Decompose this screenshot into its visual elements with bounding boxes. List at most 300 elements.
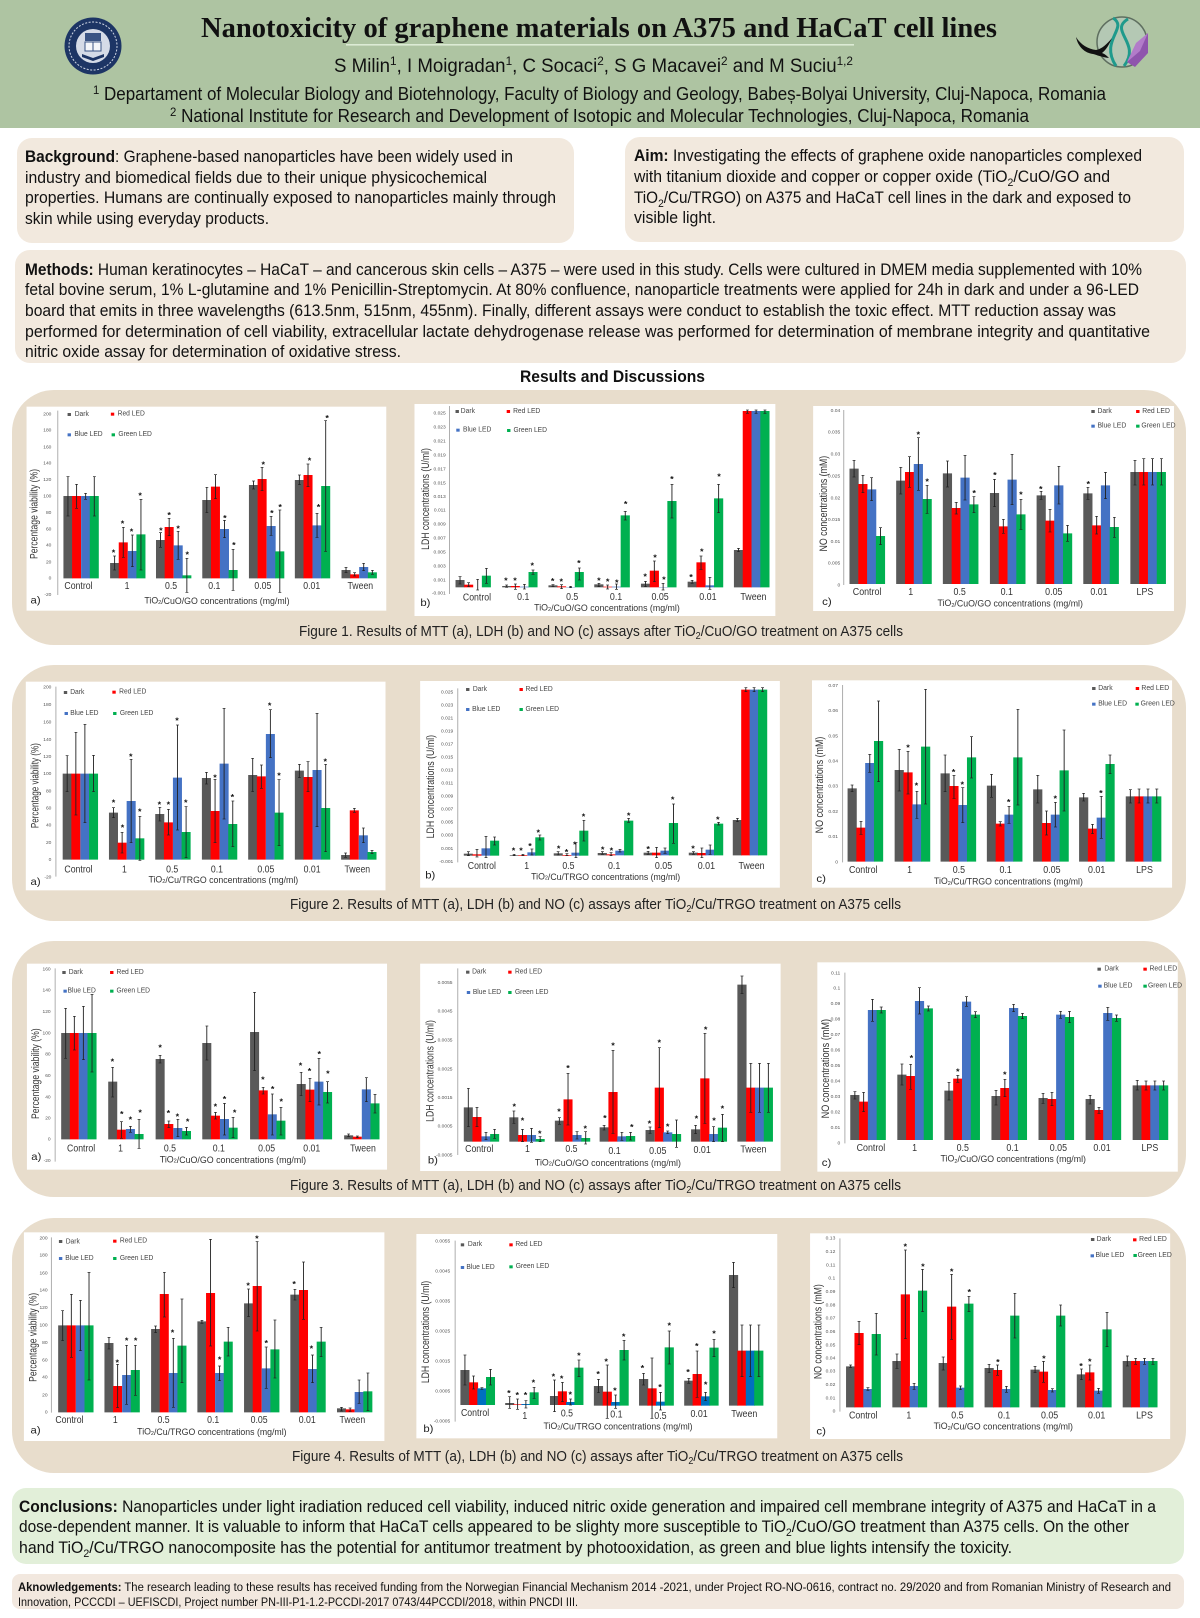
chart 1b: LDH release: 0.011	[434, 508, 446, 513]
chart 1c: NO concentration: 0.005	[828, 561, 841, 566]
chart 1b: LDH release: 0.1	[517, 591, 529, 602]
chart 1c: NO concentration: 0.035	[828, 430, 841, 435]
chart 2a: MTT viability: 60	[46, 806, 52, 811]
chart 2a: MTT viability: Percentage viability (%)	[29, 743, 42, 828]
chart 1b: LDH release: 0.013	[434, 494, 446, 499]
chart 2c: NO concentration: Blue LED	[1098, 700, 1127, 708]
chart 4a: MTT viability: 0.01	[299, 1415, 316, 1425]
panel: conclusions: hand TiO	[19, 1539, 86, 1557]
chart 2c: NO concentration	[812, 680, 1175, 888]
chart 3b: LDH release: 0.0015	[438, 1095, 453, 1100]
chart 1b: LDH release: -0.001	[432, 591, 446, 596]
chart 1a: MTT viability: 20	[46, 560, 52, 564]
chart 1a: MTT viability: 0.5	[165, 581, 177, 591]
chart 1c: NO concentration: Red LED	[1142, 408, 1170, 415]
chart 4b: LDH release: 0.01	[690, 1408, 708, 1419]
chart 3c: NO concentration: Blue LED	[1104, 982, 1132, 990]
chart 2b: LDH release: 1	[524, 860, 529, 871]
chart 3a: MTT viability: a)	[31, 1152, 41, 1163]
chart 2c: NO concentration: 1	[907, 864, 912, 875]
chart 4b: LDH release: Red LED	[515, 1241, 543, 1248]
chart 4c: NO concentration: LPS	[1136, 1410, 1153, 1421]
chart 2b: LDH release: 0.05	[655, 860, 672, 871]
authors: , I Moigradan	[397, 56, 506, 77]
affiliation 1: 1	[93, 83, 100, 97]
chart 3c: NO concentration: 0.01	[1093, 1142, 1111, 1153]
chart 3c: NO concentration: 0.06	[831, 1048, 841, 1053]
chart 3a: MTT viability: Control	[67, 1143, 95, 1154]
chart 3a: MTT viability: 80	[45, 1052, 51, 1057]
chart 3a: MTT viability: Red LED	[116, 969, 144, 976]
chart 1a: MTT viability: Control	[64, 581, 93, 591]
chart 1b: LDH release: Blue LED	[463, 426, 491, 434]
panel: conclusions: /CuO/GO treatment than A375 cells. On the other	[792, 1518, 1129, 1536]
chart 2a: MTT viability: 100	[43, 771, 52, 776]
panel: aim	[625, 137, 1184, 242]
chart 1a: MTT viability: 160	[43, 445, 52, 449]
chart 2b: LDH release: TiO	[531, 872, 547, 882]
chart 4a: MTT viability: 0.1	[207, 1415, 219, 1425]
panel: figure 1	[12, 390, 1186, 645]
caption: figure 2: 2	[686, 904, 692, 915]
chart 1b: LDH release: Dark	[461, 408, 475, 415]
chart 2c: NO concentration: 0.05	[1043, 864, 1061, 875]
chart 4c: NO concentration: 0.12	[826, 1249, 836, 1254]
chart 2a: MTT viability: /Cu/TRGO concentrations (mg/ml)	[165, 875, 298, 885]
chart 4c: NO concentration: c)	[816, 1426, 826, 1437]
chart 2c: NO concentration: TiO	[934, 877, 950, 887]
chart 4a: MTT viability: 1	[113, 1415, 118, 1425]
chart 4b: LDH release: 0.0015	[435, 1359, 451, 1364]
chart 1a: MTT viability: a)	[31, 595, 41, 606]
chart 2a: MTT viability: Control	[64, 864, 93, 875]
caption: figure 2: /Cu/TRGO treatment on A375 cells	[691, 896, 901, 913]
chart 3b: LDH release: -0.0005	[436, 1153, 453, 1157]
caption: figure 1: 2	[696, 631, 701, 642]
chart 3a: MTT viability: 0.5	[164, 1143, 176, 1154]
chart 3b: LDH release: 2	[549, 1162, 552, 1167]
chart 1b: LDH release: Control	[463, 592, 491, 603]
chart 4b: LDH release: 0.0005	[435, 1389, 451, 1394]
chart 3c: NO concentration: 0.04	[831, 1079, 841, 1084]
panel: background	[17, 138, 574, 243]
chart 4a: MTT viability: 40	[42, 1375, 48, 1380]
chart 1a: MTT viability: Green LED	[118, 431, 152, 438]
chart 1b: LDH release: 0.021	[434, 439, 446, 443]
chart 3b: LDH release: Control	[465, 1144, 493, 1154]
chart 1b: LDH release: 0.003	[434, 564, 446, 568]
chart 1c: NO concentration: 0.015	[828, 517, 841, 522]
chart 3c: NO concentration: 0.1	[1006, 1142, 1019, 1153]
chart 1a: MTT viability: -20	[44, 592, 52, 597]
chart 1c: NO concentration: TiO	[937, 599, 954, 609]
chart 4a: MTT viability: 80	[42, 1340, 48, 1345]
chart 3a: MTT viability: TiO	[160, 1155, 176, 1165]
chart 2a: MTT viability: a)	[31, 877, 41, 888]
chart 4a: MTT viability: **********	[115, 1234, 314, 1368]
chart 3c: NO concentration: 2	[954, 1158, 958, 1164]
chart 4b: LDH release: 0.5	[654, 1410, 667, 1421]
chart 2b: LDH release: 0.1	[608, 860, 620, 871]
chart 1b: LDH release: **********	[606, 472, 721, 587]
chart 3c: NO concentration: NO concentrations (mM)	[819, 1019, 832, 1118]
chart 3c: NO concentration: 0.05	[1050, 1142, 1067, 1153]
chart 1c: NO concentration: /CuO/GO concentrations (mg/ml)	[954, 599, 1083, 609]
chart 3c: NO concentration: c)	[822, 1158, 831, 1169]
chart 2a: MTT viability: 200	[43, 685, 52, 690]
chart 3a: MTT viability: 20	[45, 1116, 51, 1120]
panel: acknowledgements	[12, 1574, 1184, 1609]
chart 2b: LDH release: 2	[545, 876, 549, 881]
chart 1b: LDH release: 0.015	[434, 481, 446, 485]
chart 3a: MTT viability: 60	[45, 1073, 51, 1078]
chart 2b: LDH release: 0.011	[441, 781, 454, 786]
chart 2b: LDH release: Green LED	[526, 706, 559, 713]
chart 2b: LDH release: 0.021	[441, 716, 454, 721]
chart 2c: NO concentration: /Cu/TRGO concentrations (mg/ml)	[951, 877, 1083, 887]
chart 3a: MTT viability: 120	[42, 1009, 51, 1014]
chart 4a: MTT viability: TiO	[137, 1427, 153, 1437]
panel: background: properties. Humans are continually exposed to nanoparticles mainly through	[25, 189, 556, 207]
chart 1c: NO concentration: *******	[917, 430, 1091, 499]
chart 3b: LDH release: TiO	[535, 1158, 551, 1168]
chart 2c: NO concentration: LPS	[1136, 864, 1153, 875]
chart 2c: NO concentration: c)	[816, 873, 826, 885]
chart 1a: MTT viability: Percentage viability (%)	[28, 469, 41, 559]
chart 2b: LDH release: LDH concentrations (U/ml)	[425, 735, 437, 838]
chart 3c: NO concentration	[817, 962, 1182, 1172]
chart 3b: LDH release: Green LED	[515, 989, 549, 996]
chart 2a: MTT viability: TiO	[148, 875, 164, 885]
panel: aim: 2	[658, 198, 664, 210]
panel: background: Background: Graphene-based nanoparticles have been widely used in	[25, 148, 513, 166]
chart 2c: NO concentration: 0.1	[999, 864, 1012, 875]
chart 2b: LDH release: 0.5	[562, 860, 574, 871]
chart 1c: NO concentration: 0.04	[831, 408, 841, 413]
chart 2c: NO concentration: 0.07	[828, 683, 838, 688]
chart 4c: NO concentration: 0.1	[998, 1410, 1010, 1421]
authors: and M Suciu	[728, 56, 837, 77]
chart 4a: MTT viability: 120	[39, 1305, 48, 1310]
chart 4a: MTT viability: Green LED	[120, 1255, 153, 1262]
caption: figure 3: /Cu/TRGO treatment on A375 cells	[691, 1177, 901, 1194]
chart 4b: LDH release: b)	[423, 1423, 433, 1435]
chart 1b: LDH release: /CuO/GO concentrations (mg/ml)	[551, 603, 680, 613]
chart 2a: MTT viability: -20	[44, 875, 52, 879]
chart 2a: MTT viability: 140	[43, 737, 52, 742]
chart 4a: MTT viability	[24, 1232, 384, 1441]
chart 1b: LDH release: Tween	[740, 591, 767, 602]
chart 4c: NO concentration: 0.04	[826, 1356, 836, 1361]
chart 3c: NO concentration: 0.11	[831, 971, 841, 975]
chart 1c: NO concentration: 0.01	[831, 539, 841, 544]
chart 1a: MTT viability: TiO	[144, 596, 160, 606]
panel: conclusions: 2	[83, 1548, 89, 1560]
panel: conclusions: dose-dependent manner. It is valuable to inform that HaCaT cells appeared to be slighty more susceptible to TiO	[19, 1518, 839, 1536]
chart 4c: NO concentration: 0.11	[826, 1263, 836, 1268]
chart 1b: LDH release: 0.005	[434, 550, 446, 554]
chart 2a: MTT viability: 0.1	[211, 864, 223, 875]
chart 3a: MTT viability: 0.01	[303, 1143, 320, 1154]
chart 3b: LDH release: 0.0025	[438, 1067, 453, 1071]
chart 3a: MTT viability: Blue LED	[68, 987, 96, 995]
chart 1c: NO concentration: 0.05	[1045, 586, 1062, 597]
chart 1b: LDH release: 0.5	[566, 591, 578, 602]
chart 3b: LDH release: 0.0055	[438, 980, 453, 985]
chart 3a: MTT viability: 0.05	[258, 1143, 275, 1154]
chart 3b: LDH release: 1	[525, 1144, 530, 1154]
chart 2b: LDH release: 0.025	[441, 690, 454, 694]
affiliation 1: Departament of Molecular Biology and Biotehnology, Faculty of Biology and Geology, Babeș-Bolyai University, Cluj-Napoca, Romania	[99, 84, 1107, 104]
chart 2a: MTT viability: 0	[49, 857, 52, 862]
chart 1c: NO concentration: LPS	[1137, 586, 1153, 597]
chart 1c: NO concentration: Dark	[1097, 408, 1112, 415]
caption: figure 4: /Cu/TRGO treatment on A375 cells	[693, 1448, 903, 1465]
panel: methods: performed for determination of cell viability, extracellular lactate dehydrogenase release was performed for determination of membrane integrity and quantitative	[25, 323, 1150, 341]
chart 4c: NO concentration: ********	[904, 1242, 1092, 1371]
chart 2c: NO concentration: 0.5	[953, 864, 965, 875]
chart 2c: NO concentration: NO concentrations (mM)	[814, 737, 826, 833]
chart 1c: NO concentration: Control	[853, 586, 881, 597]
panel: methods: nitric oxide assay for determination of oxidative stress.	[25, 343, 401, 361]
chart 4a: MTT viability: 20	[42, 1393, 48, 1397]
chart 4a: MTT viability: 160	[39, 1271, 48, 1275]
chart 2c: NO concentration: Dark	[1098, 685, 1113, 692]
chart 2b: LDH release: 0.009	[441, 794, 454, 799]
chart 2a: MTT viability: Tween	[344, 864, 370, 875]
panel: conclusions	[12, 1488, 1184, 1564]
icon: university seal	[64, 18, 122, 74]
chart 4c: NO concentration: Green LED	[1138, 1252, 1172, 1259]
chart 3b: LDH release: b)	[428, 1155, 438, 1166]
chart 4c: NO concentration: 0.02	[826, 1382, 836, 1387]
chart 2c: NO concentration: Red LED	[1141, 685, 1169, 692]
chart 2a: MTT viability: Red LED	[119, 688, 146, 696]
chart 1c: NO concentration: Blue LED	[1097, 422, 1126, 430]
chart 3c: NO concentration: Dark	[1104, 965, 1119, 973]
chart 2b: LDH release: Control	[468, 860, 496, 871]
chart 4b: LDH release: Tween	[731, 1408, 757, 1419]
chart 3a: MTT viability	[27, 964, 387, 1170]
chart 4a: MTT viability: /Cu/TRGO concentrations (mg/ml)	[154, 1427, 287, 1437]
caption: figure 3: 2	[686, 1185, 692, 1196]
chart 3c: NO concentration: 0.05	[831, 1063, 841, 1068]
chart 1b: LDH release: Green LED	[513, 427, 547, 434]
chart 4b: LDH release: 2	[557, 1426, 561, 1431]
chart 3b: LDH release: LDH concentrations (U/ml)	[424, 1020, 437, 1122]
chart 1a: MTT viability: 0	[49, 576, 52, 581]
chart 3c: NO concentration: /CuO/GO concentrations (mg/ml)	[957, 1154, 1086, 1164]
chart 1a: MTT viability: 60	[46, 527, 52, 531]
chart 3a: MTT viability: ******************	[111, 1043, 330, 1126]
chart 3a: MTT viability: Dark	[69, 969, 83, 976]
chart 4a: MTT viability: Blue LED	[65, 1255, 94, 1262]
chart 3c: NO concentration: Control	[857, 1142, 885, 1153]
chart 1c: NO concentration: c)	[822, 597, 832, 608]
chart 2b: LDH release: 0.01	[698, 860, 715, 871]
chart 2b: LDH release: 0.017	[441, 742, 454, 747]
chart 3a: MTT viability: 2	[174, 1159, 177, 1164]
chart 2b: LDH release: 0.005	[441, 820, 454, 825]
chart 4b: LDH release: Green LED	[516, 1263, 549, 1270]
chart 3a: MTT viability: -20	[44, 1158, 51, 1163]
panel: figure 3	[12, 941, 1186, 1197]
chart 2c: NO concentration: Green LED	[1141, 700, 1175, 708]
chart 4a: MTT viability: Tween	[340, 1415, 365, 1425]
chart 2b: LDH release: 0.023	[441, 703, 454, 707]
chart 1a: MTT viability: 180	[43, 428, 52, 433]
chart 1b: LDH release: 2	[548, 607, 552, 613]
chart 3b: LDH release: 0.5	[565, 1144, 577, 1154]
chart 1b: LDH release: 0.019	[434, 453, 446, 458]
chart 4c: NO concentration: Red LED	[1139, 1236, 1167, 1243]
chart 1c: NO concentration: 0	[838, 583, 841, 587]
chart 4b: LDH release: **********	[604, 1321, 717, 1395]
chart 4b: LDH release: 0.0045	[435, 1269, 451, 1273]
chart 3c: NO concentration: 0.08	[831, 1017, 841, 1022]
chart 3b: LDH release: Dark	[472, 968, 487, 976]
chart 4a: MTT viability: Control	[55, 1415, 84, 1425]
chart 3a: MTT viability: 1	[118, 1143, 123, 1154]
chart 1a: MTT viability: Dark	[75, 411, 89, 418]
chart 4a: MTT viability: 200	[39, 1236, 48, 1240]
chart 1a: MTT viability: 0.01	[303, 581, 320, 591]
chart 2c: NO concentration: 0.06	[828, 708, 838, 713]
chart 3c: NO concentration: 0.07	[831, 1032, 841, 1037]
chart 2b: LDH release: Blue LED	[472, 706, 500, 713]
chart 4a: MTT viability: a)	[31, 1425, 41, 1436]
authors: 1,2	[837, 54, 853, 68]
chart 3c: NO concentration: 0.02	[831, 1110, 841, 1114]
chart 2a: MTT viability: 0.5	[166, 864, 178, 875]
authors: 2	[597, 54, 604, 68]
heading: results and discussions: Results and Discussions	[520, 368, 705, 386]
chart 4c: NO concentration: 0.09	[826, 1289, 836, 1294]
chart 3c: NO concentration: Red LED	[1149, 965, 1177, 973]
chart 3c: NO concentration: TiO	[941, 1154, 957, 1164]
chart 3c: NO concentration: 0.03	[831, 1094, 841, 1099]
chart 1a: MTT viability: 2	[158, 600, 162, 606]
chart 3b: LDH release: Red LED	[515, 968, 542, 976]
caption: figure 2: Figure 2. Results of MTT (a), LDH (b) and NO (c) assays after TiO	[290, 896, 728, 913]
chart 4b: LDH release	[416, 1234, 777, 1438]
chart 3c: NO concentration: 0	[838, 1141, 841, 1145]
chart 2a: MTT viability: Green LED	[120, 710, 153, 717]
chart 2c: NO concentration: 2	[948, 880, 951, 887]
chart 4c: NO concentration: 0.05	[826, 1343, 836, 1347]
panel: aim: visible light.	[634, 209, 716, 227]
caption: figure 3: Figure 3. Results of MTT (a), LDH (b) and NO (c) assays after TiO	[290, 1177, 728, 1194]
icon: DNA crystal and bird logo	[1076, 17, 1148, 67]
chart 2b: LDH release: /Cu/TRGO concentrations (mg/ml)	[548, 872, 680, 882]
caption: figure 4: Figure 4. Results of MTT (a), LDH (b) and NO (c) assays after TiO	[292, 1448, 730, 1465]
chart 2b: LDH release: 0.007	[441, 807, 454, 812]
chart 1a: MTT viability: 1	[125, 581, 129, 591]
chart 4a: MTT viability: 100	[39, 1323, 48, 1328]
chart 1a: MTT viability: 0.1	[208, 581, 220, 591]
chart 1b: LDH release: 0.017	[434, 467, 446, 471]
chart 2a: MTT viability	[26, 682, 386, 890]
authors: , C Socaci	[512, 56, 597, 77]
chart 2b: LDH release: 0.019	[441, 729, 454, 734]
chart 3b: LDH release: ******	[512, 1063, 588, 1138]
chart 2c: NO concentration: Control	[849, 864, 878, 875]
caption: figure 1: Figure 1. Results of MTT (a), LDH (b) and NO (c) assays after TiO	[299, 623, 737, 640]
chart 1c: NO concentration: 0.01	[1090, 586, 1108, 597]
chart 2b: LDH release: Dark	[473, 686, 488, 693]
chart 4a: MTT viability: 0	[45, 1410, 48, 1415]
chart 3a: MTT viability: 160	[42, 967, 51, 971]
chart 4a: MTT viability: 0.5	[157, 1415, 170, 1425]
chart 1b: LDH release: LDH concentrations (U/ml)	[419, 448, 432, 550]
chart 2c: NO concentration: 0.01	[1088, 864, 1105, 875]
chart 3b: LDH release: Blue LED	[473, 989, 501, 996]
chart 3b: LDH release	[420, 964, 781, 1171]
chart 2a: MTT viability: 0.01	[304, 864, 321, 875]
chart 3c: NO concentration: LPS	[1141, 1142, 1158, 1153]
chart 3b: LDH release: /CuO/GO concentrations (mg/ml)	[552, 1158, 681, 1168]
panel: aim: with titanium dioxide and copper or copper oxide (TiO	[634, 168, 1024, 186]
chart 1c: NO concentration: 0.5	[954, 586, 966, 597]
chart 2a: MTT viability: 1	[122, 864, 127, 875]
chart 1a: MTT viability: 0.05	[254, 581, 271, 591]
chart 1a: MTT viability: Red LED	[118, 410, 145, 418]
chart 3c: NO concentration: 0.09	[831, 1001, 841, 1006]
panel: figure 2	[12, 665, 1186, 921]
chart 2a: MTT viability: 20	[46, 840, 52, 845]
chart 1c: NO concentration: 0.025	[828, 474, 841, 478]
chart 4a: MTT viability: Red LED	[120, 1237, 147, 1245]
chart 4b: LDH release: Blue LED	[466, 1264, 495, 1271]
chart 3b: LDH release: 0.1	[608, 1145, 621, 1156]
chart 4c: NO concentration: 0.13	[826, 1236, 836, 1241]
chart 4b: LDH release: Control	[461, 1408, 489, 1418]
chart 4b: LDH release: 0.0035	[435, 1299, 451, 1304]
chart 3a: MTT viability: /CuO/GO concentrations (mg/ml)	[177, 1155, 306, 1165]
chart 4b: LDH release: -0.0005	[434, 1419, 451, 1424]
panel: acknowledgements: Innovation, PCCCDI – UEFISCDI, Project number PN-III-P1-1.2-PCCDI-2017 0743/44PCCDI/2018, within PNCDI III.	[18, 1597, 578, 1609]
chart 4b: LDH release: 0.0055	[435, 1239, 451, 1243]
panel: acknowledgements: Aknowledgements: The research leading to these results has received funding from the Norwegian Financial Mechanism 2014 -2021, under Project RO-NO-0616, contract no. 29/2020 and from Romanian Ministry of Research and	[18, 1582, 1171, 1594]
title: Nanotoxicity of graphene materials on A375 and HaCaT cell lines	[201, 12, 997, 44]
chart 3b: LDH release: 0.0045	[438, 1009, 453, 1014]
chart 3b: LDH release: 0.0005	[438, 1124, 453, 1129]
chart 2a: MTT viability: Blue LED	[70, 710, 99, 717]
chart 1a: MTT viability: Tween	[347, 581, 373, 591]
chart 1b: LDH release: 0.007	[434, 536, 446, 541]
panel: figure 4	[12, 1218, 1186, 1473]
chart 1c: NO concentration: 0.1	[1001, 586, 1013, 597]
chart 2c: NO concentration: 0.05	[828, 734, 838, 738]
chart 3a: MTT viability: 140	[42, 988, 51, 993]
chart 2b: LDH release: -0.001	[439, 859, 454, 864]
chart 3c: NO concentration: 0.5	[957, 1142, 969, 1153]
chart 4c: NO concentration: NO concentrations (mM)	[812, 1284, 825, 1379]
chart 1a: MTT viability	[27, 407, 386, 611]
chart 2c: NO concentration: *******	[906, 743, 1103, 807]
chart 1c: NO concentration: NO concentrations (mM)	[817, 456, 830, 551]
chart 4c: NO concentration: 0.06	[826, 1329, 836, 1334]
chart 4c: NO concentration	[810, 1233, 1172, 1439]
chart 1a: MTT viability: ****************	[112, 413, 330, 560]
chart 4b: LDH release: 0.0025	[435, 1329, 451, 1334]
chart 4b: LDH release: 0.1	[610, 1409, 623, 1420]
chart 1b: LDH release: 0.1	[610, 591, 622, 602]
chart 3c: NO concentration: Green LED	[1148, 982, 1182, 990]
panel: methods: Methods: Human keratinocytes – HaCaT – and cancerous skin cells – A375 – were used in this study. Cells were cultured in DMEM media supplemented with 10%	[25, 261, 1142, 279]
chart 2b: LDH release: Red LED	[526, 686, 553, 693]
chart 4c: NO concentration: Control	[849, 1410, 878, 1421]
